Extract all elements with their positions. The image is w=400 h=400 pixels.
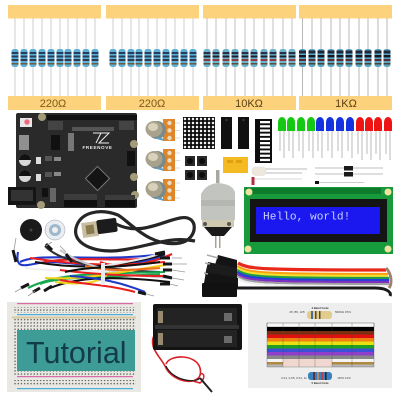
diodes <box>315 166 383 184</box>
colour table <box>267 323 374 367</box>
panel: 220 ohm resistors right: 220Ω <box>139 98 165 110</box>
LED dot matrix <box>183 117 215 149</box>
panel: 220 ohm resistors left <box>8 5 101 110</box>
rainbow ribbon cable <box>202 255 391 297</box>
white LED <box>252 167 307 176</box>
LCD screen <box>256 207 380 234</box>
panel: 10K ohm resistors: 10KΩ <box>235 98 263 110</box>
LEDs: green, blue, red <box>278 117 392 160</box>
USB cable <box>76 212 195 251</box>
jumper wires <box>13 238 187 296</box>
panel: 1K ohm resistors <box>299 5 392 110</box>
breadboard <box>7 302 141 392</box>
4-band resistor <box>307 311 332 319</box>
battery holder with wires <box>152 304 242 392</box>
DC motor <box>201 170 235 248</box>
panel: 10K ohm resistors <box>203 5 296 110</box>
chart heading: 5 band: 5 Band Code <box>311 381 329 385</box>
LCD module <box>244 187 393 254</box>
push buttons <box>185 156 207 180</box>
panel: 220 ohm resistors left: 220Ω <box>40 98 66 110</box>
panel: 220 ohm resistors right <box>106 5 199 110</box>
tutorial overlay <box>17 330 135 371</box>
integrated circuits <box>221 117 249 149</box>
yellow capacitors <box>223 157 248 173</box>
5-band resistor <box>308 372 332 380</box>
panel: 1K ohm resistors: 1KΩ <box>335 98 357 110</box>
left value label: 0.01, 0.05, 0.51, 11 <box>281 376 307 380</box>
logo <box>93 133 109 143</box>
potentiometers <box>146 119 180 201</box>
small red component <box>252 177 302 185</box>
tolerance labels: 25, B5, 105 <box>289 310 305 314</box>
chart heading: 4 band: 4 Band Code <box>311 306 329 310</box>
resistor colour code chart <box>248 303 392 388</box>
LCD text: Hello, world! <box>263 212 350 224</box>
tolerance value: 560KΩ ±5% <box>335 310 351 314</box>
tutorial label: Tutorial <box>26 336 127 370</box>
brand label: FREENOVE <box>82 145 113 150</box>
LED bar graph <box>255 119 272 163</box>
control board <box>8 113 139 209</box>
buzzers <box>20 219 65 241</box>
right value label: 1870 ±1% <box>337 376 351 380</box>
